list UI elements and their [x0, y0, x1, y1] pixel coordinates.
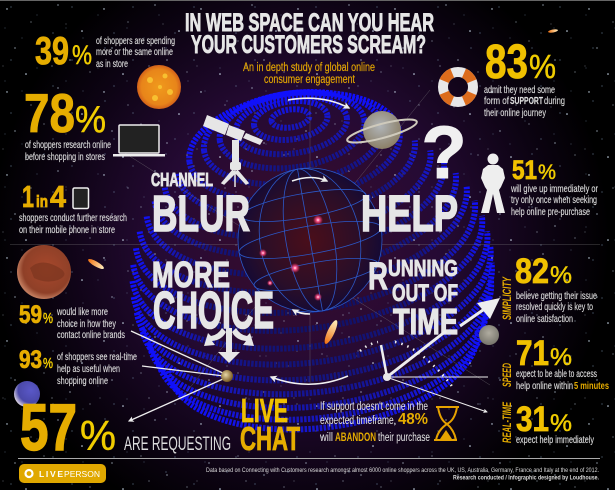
subtitle: An in depth study of global online	[243, 62, 375, 74]
callout: 48% abandon: their purchase	[378, 432, 430, 444]
stat: 78%: %	[75, 99, 106, 141]
stat: 83%: %	[529, 48, 556, 85]
stat: 51%	[510, 155, 598, 218]
heading: more choice: MORE	[152, 254, 230, 295]
clock with arrows	[360, 298, 500, 412]
stat: 59%: 59	[19, 301, 42, 329]
logo: liveperson: PERSON	[64, 469, 100, 479]
stat: 57% are requesting live chat	[20, 390, 300, 464]
stat: 82% simplicity: online satisfaction	[516, 313, 573, 325]
stat: 57% are requesting live chat: %	[80, 412, 116, 459]
stat: 93%: 93	[19, 346, 42, 374]
icon: telescope	[203, 115, 263, 187]
stat: 93%: help as useful when	[57, 363, 120, 375]
stat: 1 in 4: in	[36, 192, 48, 211]
stat: 39%: 39	[35, 30, 69, 73]
stat: 1 in 4: shoppers conduct further research	[19, 212, 127, 224]
stat: 78%: of shoppers research online	[25, 139, 111, 151]
callout: 48% abandon	[319, 401, 430, 444]
stat: 39%: more or the same online	[96, 46, 173, 58]
heading: running out of time: OUT OF	[392, 280, 458, 307]
title: IN WEB SPACE CAN YOU HEAR	[185, 9, 434, 37]
footer note	[206, 467, 599, 482]
stat: 1 in 4: 4	[50, 179, 67, 214]
stat: 83%: admit they need some	[484, 84, 555, 96]
icon: person	[481, 154, 505, 213]
stat: 57% are requesting live chat: CHAT	[240, 420, 300, 457]
stat: 71% speed	[502, 334, 609, 392]
heading: more choice: CHOICE	[153, 282, 274, 340]
callout: 48% abandon: 48%	[398, 411, 428, 428]
three-way arrow	[204, 328, 254, 363]
stat: 83%: SUPPORT	[510, 95, 543, 107]
stat: 82% simplicity	[502, 252, 597, 325]
stat: 39%: of shoppers are spending	[96, 35, 175, 47]
stat: 93%	[19, 346, 137, 387]
binary globe	[109, 69, 512, 452]
stat: 82% simplicity: 82	[515, 252, 549, 291]
stat: 78%: before shopping in stores	[25, 151, 105, 163]
stat: 83%: form of	[484, 95, 509, 107]
stat: 31% real-time	[502, 400, 595, 446]
icon: saturn	[345, 111, 419, 149]
heading: running out of time: UNNING	[388, 255, 458, 281]
stat: 93%: shopping online	[57, 375, 108, 387]
stat: 83%: 83	[485, 36, 528, 89]
subtitle	[243, 62, 375, 86]
stat: 51%: 51	[512, 155, 537, 185]
icon: life ring	[437, 66, 479, 108]
title: YOUR CUSTOMERS SCREAM?	[191, 31, 426, 59]
stat: 59%: choice in how they	[57, 318, 117, 330]
stat: 59%	[19, 301, 125, 341]
title	[185, 9, 434, 59]
icon: sun	[137, 65, 181, 109]
stat: 93%: of shoppers see real-time	[57, 351, 137, 363]
stat: 83%: during	[544, 95, 565, 107]
stat: 82% simplicity: %	[550, 262, 572, 289]
stat: 59%: %	[43, 310, 53, 327]
subtitle: consumer engagement	[264, 74, 356, 86]
faint crosshair lines	[10, 90, 600, 400]
stat: 39%: as in store	[96, 58, 128, 70]
heading: running out of time	[368, 255, 458, 342]
stat: 57% are requesting live chat: ARE REQUESTING	[124, 434, 231, 455]
callout: 48% abandon: will	[319, 432, 333, 444]
stat: 1 in 4: on their mobile phone in store	[19, 224, 115, 236]
stat: 82% simplicity: SIMPLICITY	[502, 276, 514, 320]
heading: channel blur: BLUR	[152, 185, 250, 242]
gold sphere with arrows	[129, 331, 233, 421]
logo: liveperson: LIVE	[39, 469, 63, 479]
heading: more choice	[152, 254, 274, 340]
stat: 78%	[24, 82, 111, 163]
heading: running out of time: TIME	[393, 301, 458, 342]
stat: 57% are requesting live chat: LIVE	[241, 392, 288, 429]
stat: 51%: %	[538, 161, 556, 184]
curved orbit arrows	[271, 98, 349, 384]
heading: channel blur: CHANNEL	[151, 170, 213, 190]
footer rule	[18, 458, 600, 459]
stat: 1 in 4	[19, 179, 127, 236]
stat: 31% real-time: REAL-TIME	[502, 402, 514, 443]
stat: 83%: their online journey	[484, 107, 547, 119]
stat: 31% real-time: 31	[516, 400, 549, 439]
icon: question mark: ?	[421, 111, 467, 194]
icon: comets	[87, 29, 558, 345]
stat: 71% speed: help online within	[516, 380, 573, 392]
icon: hourglass	[434, 407, 459, 440]
stat: 59%: contact online brands	[57, 329, 125, 341]
stat: 71% speed: SPEED	[502, 363, 514, 387]
stat: 31% real-time: %	[550, 410, 572, 437]
wireframe core globe	[227, 157, 393, 323]
callout: 48% abandon: expected timeframe,	[320, 415, 396, 427]
core globe light flares	[259, 215, 323, 301]
stat: 78%: 78	[24, 82, 75, 144]
stat: 71% speed: 71	[516, 334, 549, 373]
icon: laptop	[113, 125, 165, 156]
stat: 59%: would like more	[56, 306, 108, 318]
callout: 48% abandon: ABANDON	[335, 432, 376, 444]
icon: grey planet	[479, 325, 499, 345]
stat: 83%	[484, 36, 565, 119]
stat: 57% are requesting live chat: 57	[20, 390, 77, 464]
stat: 93%: %	[43, 355, 53, 372]
heading: channel blur	[151, 170, 250, 242]
logo: liveperson	[19, 464, 106, 483]
heading: running out of time: R	[368, 255, 388, 298]
icon: tablet	[73, 188, 88, 208]
icon: purple planet	[14, 381, 40, 407]
callout: 48% abandon: If support doesn't come in the	[320, 401, 428, 413]
stat: 39%: %	[72, 40, 92, 70]
stat: 39%	[35, 30, 175, 73]
icon: mars	[17, 245, 71, 299]
stat: 71% speed: %	[550, 344, 572, 371]
heading: help: HELP	[361, 185, 458, 242]
stat: 1 in 4: 1	[22, 179, 34, 214]
